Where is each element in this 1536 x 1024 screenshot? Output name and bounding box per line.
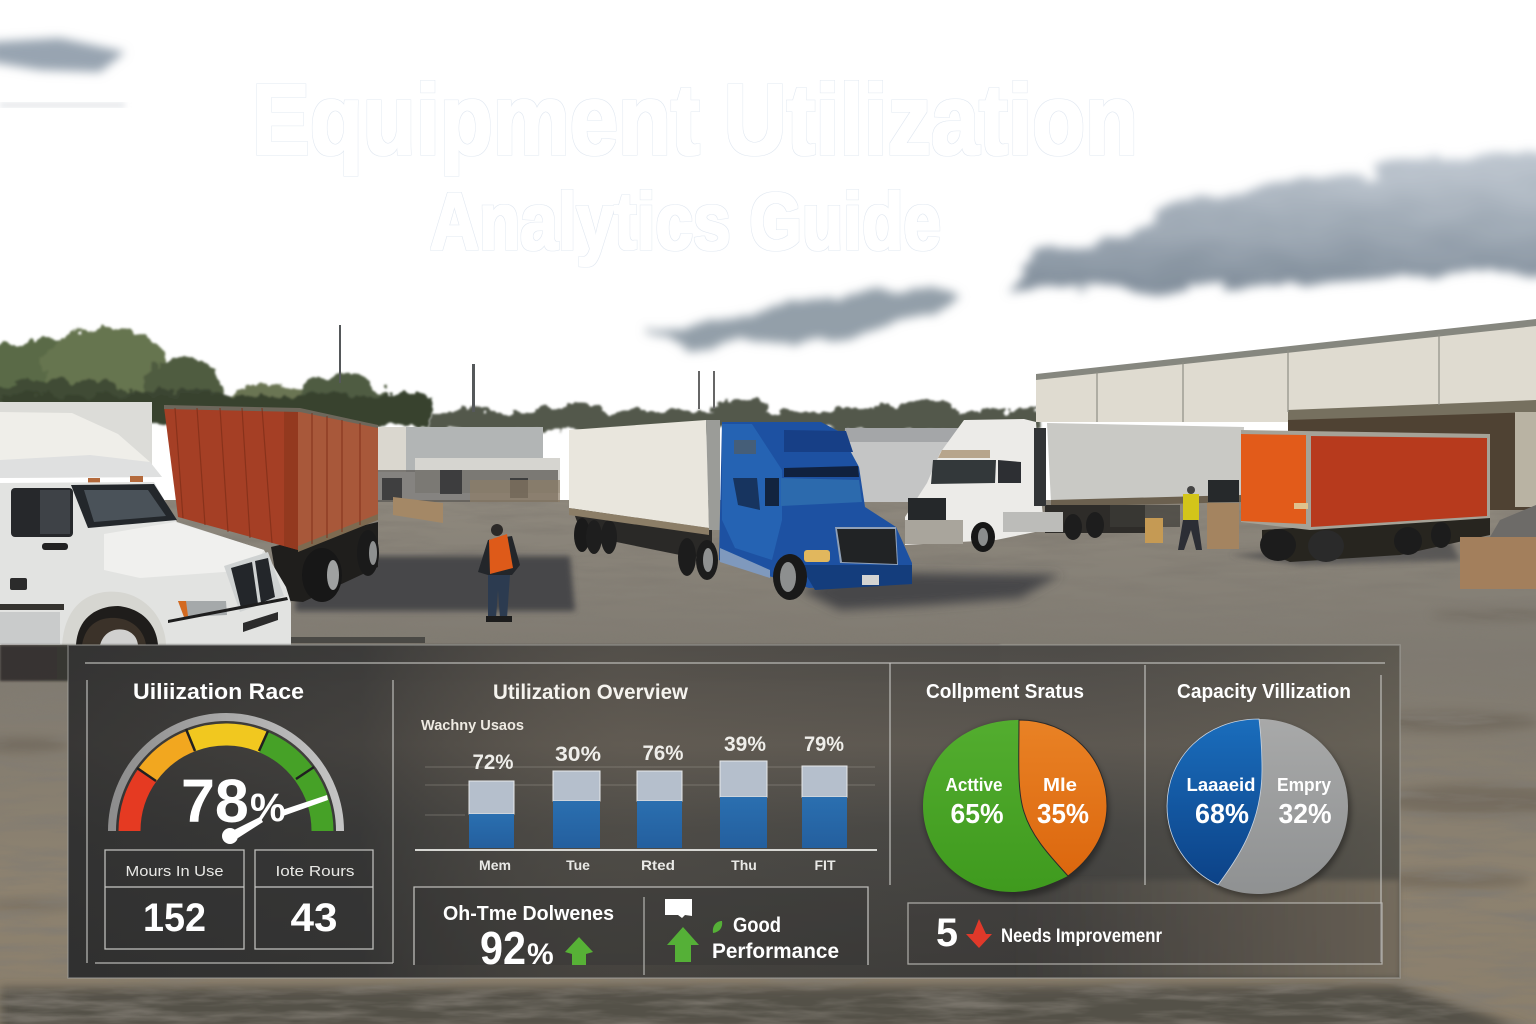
- icon: small green up arrow: [565, 937, 593, 965]
- orange and red box trailer at dock: [1241, 430, 1490, 562]
- bar chart: 39%: [724, 733, 766, 756]
- icon: red down arrow: [966, 919, 992, 948]
- heading: utilization race: Uiliization Race: [133, 679, 304, 704]
- gauge needle: [222, 795, 328, 844]
- dashboard panel: [68, 645, 1400, 978]
- dashboard dark top band: [0, 645, 1000, 681]
- bar chart: 72%: [472, 751, 514, 774]
- gauge dial: [112, 717, 340, 831]
- pie chart: active vs idle: [923, 720, 1109, 897]
- bar chart: Rted: [641, 857, 675, 873]
- bar chart: Mem: [479, 857, 511, 873]
- stat: hours in use: Mours In Use: [126, 863, 224, 880]
- panel: equipment status: [923, 681, 1109, 897]
- red shipping container trailer: [164, 405, 379, 602]
- pie chart: loaded vs empty: [1167, 719, 1351, 898]
- on-time deliveries box: Oh-Tme Dolwenes: [443, 903, 614, 925]
- good performance callout: Good: [733, 914, 781, 937]
- trees and light poles: [0, 325, 1040, 431]
- shadows on yard: [290, 540, 1460, 643]
- bar chart: 30%: [555, 743, 601, 766]
- bar chart: 76%: [642, 742, 684, 765]
- pie chart: active vs idle: Mle: [1043, 775, 1077, 795]
- blue semi truck with white trailer: [569, 420, 912, 600]
- gauge value: %: [250, 786, 286, 830]
- title: Equipment Utilization: [252, 64, 1138, 176]
- good performance callout: Performance: [712, 940, 839, 963]
- on-time deliveries box: %: [527, 938, 554, 971]
- white truck, left foreground: [0, 402, 291, 645]
- icon: white note: [665, 899, 692, 918]
- stat: idle hours: [255, 850, 373, 949]
- gauge value: [181, 767, 286, 835]
- title: [252, 64, 1138, 267]
- heading: utilization overview: Utilization Overview: [493, 681, 689, 704]
- icon: green leaf: [713, 921, 722, 933]
- on-time deliveries box: 92: [480, 922, 526, 974]
- needs improvement callout: Needs Improvemenr: [1001, 926, 1163, 947]
- pie chart: loaded vs empty: 32%: [1278, 798, 1332, 829]
- pie chart: loaded vs empty: Laaaeid: [1186, 775, 1256, 795]
- bar chart: 79%: [804, 733, 844, 756]
- bar chart: FIT: [814, 857, 836, 873]
- pie chart: loaded vs empty: 68%: [1195, 798, 1249, 829]
- stat: idle hours: 43: [290, 896, 338, 940]
- background warehouse and yard stock: [378, 427, 960, 523]
- title: Analytics Guide: [430, 177, 941, 267]
- heading: capacity utilization: Capacity Villization: [1177, 681, 1351, 703]
- bar chart: [415, 733, 877, 873]
- stat: idle hours: Iote Rours: [276, 863, 354, 880]
- worker in orange vest: [478, 524, 520, 622]
- icon: large green up arrow: [667, 927, 699, 962]
- bar chart: Tue: [566, 857, 590, 873]
- needs improvement callout: 5: [936, 911, 958, 955]
- good performance callout: [665, 899, 839, 963]
- panel: utilization gauge: [105, 679, 373, 949]
- on-time deliveries box: [414, 887, 868, 975]
- dock worker in yellow vest and pallets: [1145, 480, 1536, 589]
- stat: hours in use: [105, 850, 244, 949]
- pie chart: loaded vs empty: Empry: [1277, 775, 1331, 795]
- stat: hours in use: 152: [143, 896, 206, 940]
- needs improvement callout: [908, 903, 1382, 964]
- chart subtitle: Wachny Usaos: [421, 717, 524, 734]
- pie chart: active vs idle: 35%: [1037, 798, 1089, 829]
- yard ground: [0, 500, 1536, 1024]
- pie chart: active vs idle: 65%: [950, 798, 1004, 829]
- panel: utilization overview: [414, 681, 877, 975]
- panel: capacity utilization: [1167, 681, 1351, 898]
- clouds: [0, 38, 1536, 346]
- bar chart: Thu: [731, 857, 757, 873]
- background: sky: [0, 0, 1536, 430]
- gauge value: 78: [181, 767, 249, 835]
- white semi truck with grey trailer: [905, 419, 1244, 552]
- pie chart: active vs idle: Acttive: [946, 775, 1002, 795]
- main warehouse: [1036, 319, 1536, 510]
- heading: equipment status: Collpment Sratus: [926, 681, 1084, 703]
